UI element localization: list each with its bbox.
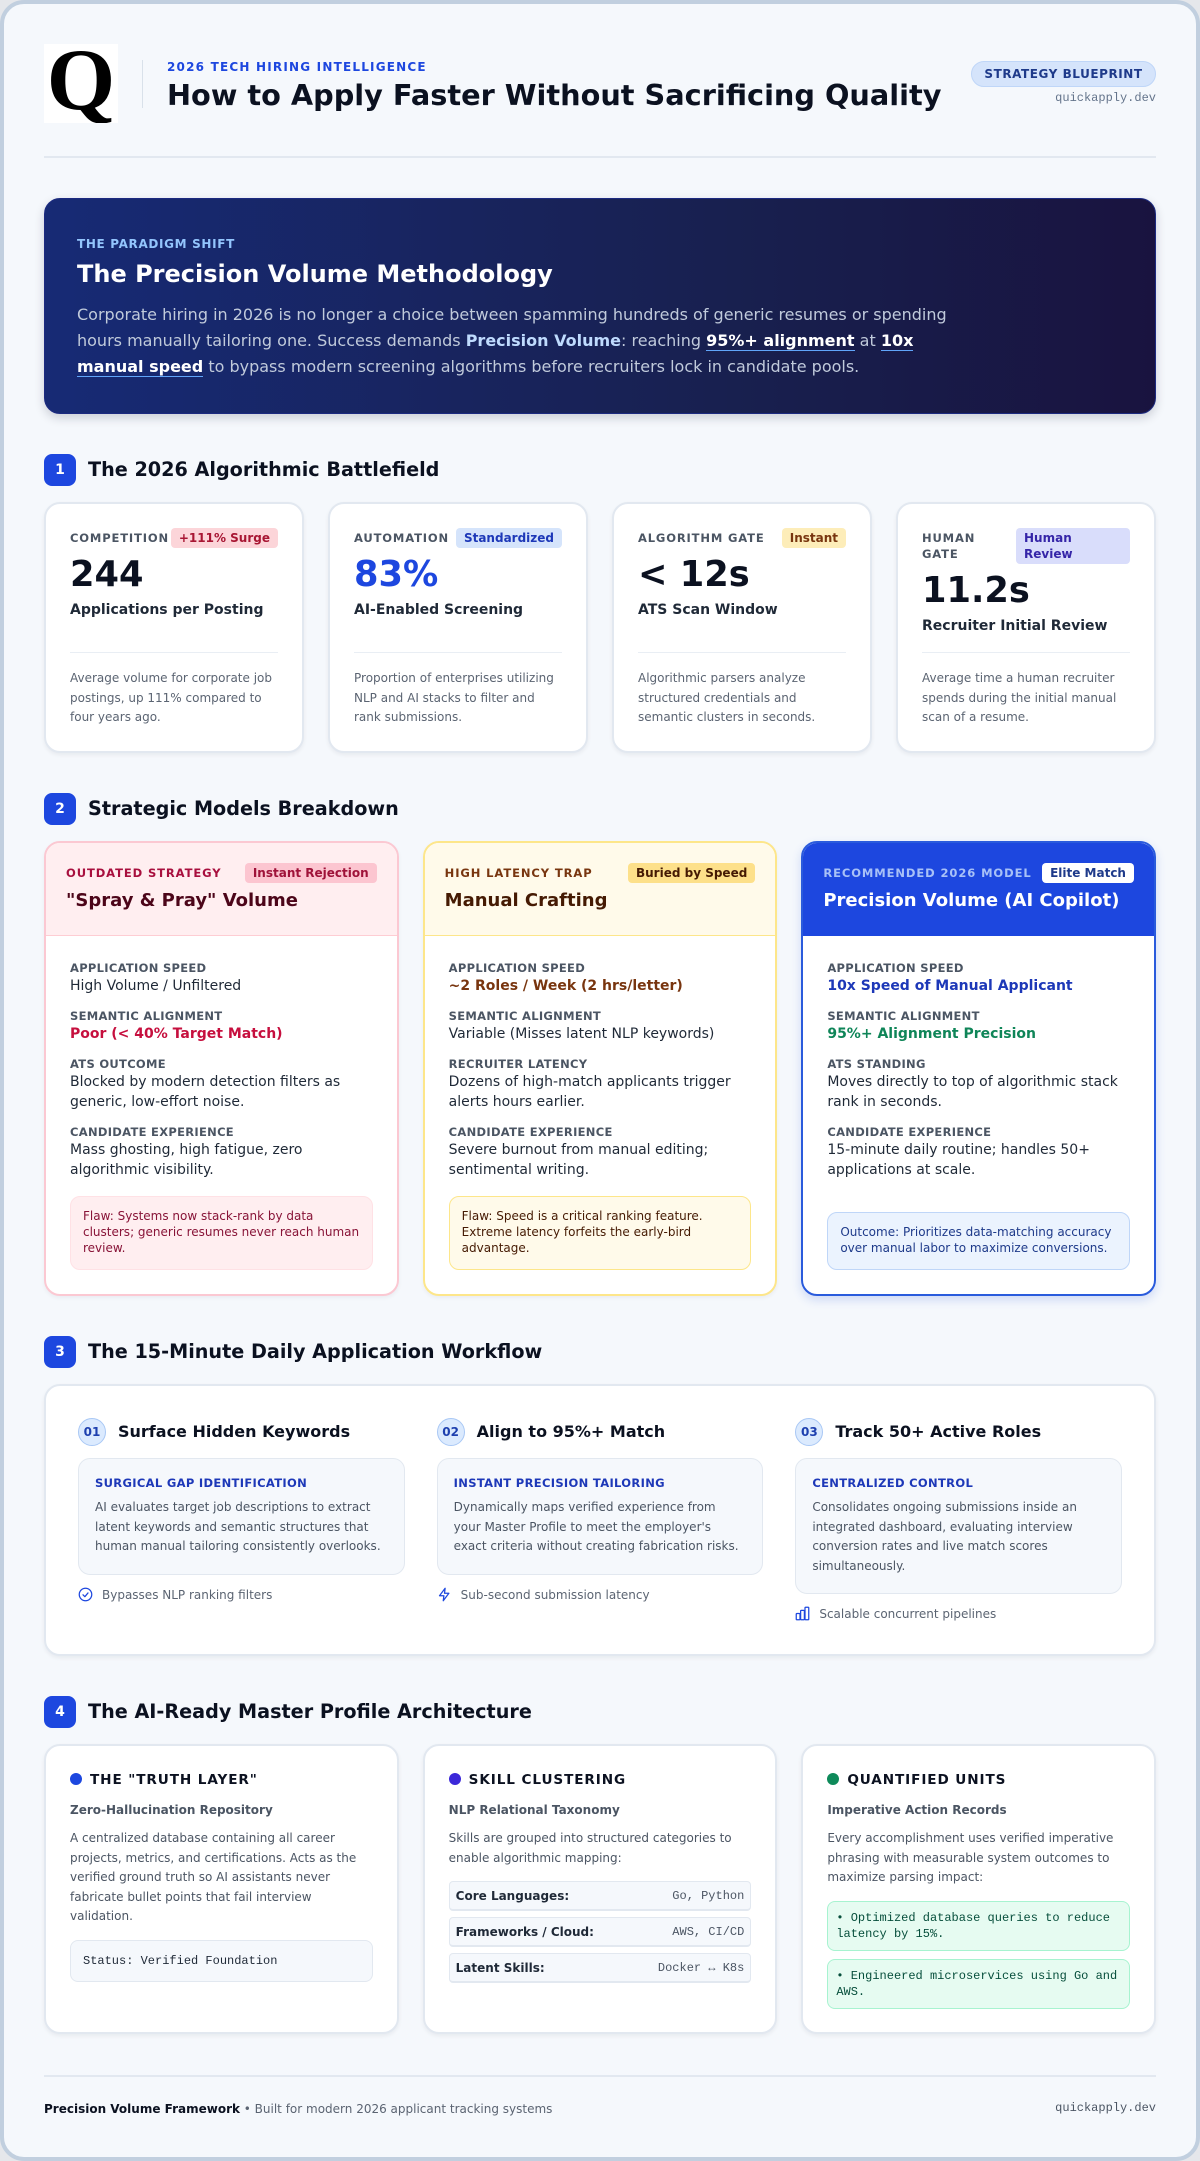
- skill row: core languages: Core Languages:: [456, 1888, 569, 1902]
- step title: Surface Hidden Keywords: [118, 1422, 350, 1441]
- stat badge: Instant: [790, 531, 838, 545]
- model title: Precision Volume (AI Copilot): [823, 890, 1119, 910]
- stat badge: [1016, 528, 1130, 564]
- step detail box: AI evaluates target job descriptions to extract latent keywords and semantic structures that human manual tailoring consistently overlooks.: [95, 1500, 381, 1553]
- icon: check circle: [78, 1588, 92, 1602]
- status box: [70, 1940, 373, 1982]
- section title: The AI-Ready Master Profile Architecture: [88, 1700, 532, 1723]
- model attributes: APPLICATION SPEED: [827, 961, 964, 975]
- stat description: Average time a human recruiter spends during the initial manual scan of a resume.: [922, 671, 1116, 724]
- icon: bar chart: [796, 1606, 810, 1620]
- stat badge: [782, 528, 846, 548]
- model header: [425, 843, 775, 936]
- icon: lightning bolt: [438, 1588, 450, 1602]
- section number: [44, 1336, 76, 1368]
- outcome callout: [827, 1212, 1130, 1270]
- card subheading: Imperative Action Records: [827, 1803, 1007, 1817]
- step detail box: Dynamically maps verified experience from your Master Profile to meet the employer's exact criteria without creating fabrication risks.: [454, 1500, 739, 1553]
- model attributes: SEMANTIC ALIGNMENT: [70, 1009, 222, 1023]
- profile card: skill clustering: [423, 1744, 777, 2034]
- eyebrow: 2026 TECH HIRING INTELLIGENCE: [167, 60, 427, 74]
- hero title: The Precision Volume Methodology: [77, 260, 553, 288]
- stat card: automation: [328, 502, 588, 753]
- model attributes: APPLICATION SPEED: [70, 961, 206, 975]
- flaw callout: [449, 1196, 751, 1270]
- model attributes: Dozens of high-match applicants trigger alerts hours earlier.: [449, 1074, 731, 1110]
- model title: Manual Crafting: [445, 890, 607, 910]
- model badge: Buried by Speed: [636, 866, 747, 880]
- step detail box: INSTANT PRECISION TAILORING: [454, 1476, 665, 1490]
- card heading: SKILL CLUSTERING: [469, 1772, 626, 1788]
- step detail box: SURGICAL GAP IDENTIFICATION: [95, 1476, 307, 1490]
- model attributes: 10x Speed of Manual Applicant: [827, 978, 1073, 994]
- stat badge: [171, 528, 278, 548]
- card heading: QUANTIFIED UNITS: [847, 1772, 1006, 1788]
- section number: [44, 1696, 76, 1728]
- section title: The 15-Minute Daily Application Workflow: [88, 1340, 542, 1363]
- stat label: [922, 531, 975, 561]
- title: How to Apply Faster Without Sacrificing Quality: [167, 78, 942, 112]
- card heading: THE "TRUTH LAYER": [90, 1772, 258, 1788]
- stat caption: Applications per Posting: [70, 602, 264, 618]
- step note: Sub-second submission latency: [461, 1588, 650, 1602]
- flaw callout: Flaw: Speed is a critical ranking feature. Extreme latency forfeits the early-bird advantage.: [462, 1209, 703, 1255]
- model attributes: [448, 961, 731, 1178]
- step number: 02: [442, 1425, 459, 1439]
- model header: [803, 843, 1154, 936]
- section heading 1: [44, 454, 439, 486]
- stat label: AUTOMATION: [354, 531, 449, 545]
- skill row: frameworks and cloud: [449, 1917, 751, 1947]
- stat badge: Human: [1024, 531, 1072, 545]
- step 01: [78, 1418, 405, 1602]
- step detail box: [78, 1458, 405, 1575]
- example bullet 1: • Optimized database queries to reduce latency by 15%.: [836, 1911, 1110, 1941]
- model attributes: Poor (< 40% Target Match): [70, 1026, 283, 1042]
- skill row: latent skills: [449, 1953, 751, 1983]
- step number: 01: [84, 1425, 100, 1439]
- stat value: 11.2s: [922, 570, 1030, 611]
- example bullet 1: [827, 1901, 1130, 1951]
- stat label: ALGORITHM GATE: [638, 531, 765, 545]
- outcome callout: Outcome: Prioritizes data-matching accuracy over manual labor to maximize conversions.: [840, 1225, 1111, 1255]
- stat badge: [456, 528, 562, 548]
- model attributes: RECRUITER LATENCY: [449, 1057, 587, 1071]
- panel: daily workflow: [44, 1384, 1156, 1656]
- skill row: frameworks and cloud: AWS, CI/CD: [672, 1924, 744, 1938]
- model attributes: [70, 961, 340, 1178]
- section heading 2: [44, 793, 399, 825]
- step number: 03: [801, 1425, 818, 1439]
- card subheading: Zero-Hallucination Repository: [70, 1803, 273, 1817]
- hero paragraph: Corporate hiring in 2026 is no longer a choice between spamming hundreds of generic resumes or spending hours manually tailoring one. Success demands Precision Volume: reaching 95%+ alignment at 10x manual speed to bypass modern screening algorithms before recruiters lock in candidate pools.: [77, 304, 947, 376]
- hero eyebrow: THE PARADIGM SHIFT: [77, 237, 235, 251]
- status box: Status: Verified Foundation: [83, 1954, 277, 1968]
- skill row: core languages: Go, Python: [672, 1888, 744, 1902]
- dot marker: [449, 1773, 461, 1785]
- skill row: latent skills: Docker ↔ K8s: [658, 1960, 744, 1974]
- model card: precision volume: [801, 841, 1156, 1296]
- dot marker: [827, 1773, 839, 1785]
- model attributes: SEMANTIC ALIGNMENT: [449, 1009, 601, 1023]
- hero panel: the precision volume methodology: [44, 198, 1156, 414]
- badge: strategy blueprint: STRATEGY BLUEPRINT: [984, 67, 1143, 81]
- step 03: [795, 1418, 1122, 1620]
- model attributes: Moves directly to top of algorithmic stack rank in seconds.: [827, 1074, 1118, 1110]
- model badge: [628, 863, 755, 883]
- model eyebrow: RECOMMENDED 2026 MODEL: [823, 866, 1032, 880]
- section number: 1: [55, 462, 65, 478]
- flaw callout: Flaw: Systems now stack-rank by data clusters; generic resumes never reach human review.: [83, 1209, 359, 1255]
- section number: [44, 793, 76, 825]
- stat description: Algorithmic parsers analyze structured credentials and semantic clusters in seconds.: [638, 671, 815, 724]
- stat description: Proportion of enterprises utilizing NLP and AI stacks to filter and rank submissions.: [354, 671, 554, 724]
- dot marker: [70, 1773, 82, 1785]
- step detail box: [795, 1458, 1122, 1594]
- skill row: latent skills: Latent Skills:: [456, 1960, 545, 1974]
- footer text: Precision Volume Framework • Built for modern 2026 applicant tracking systems: [44, 2102, 552, 2116]
- skill row: core languages: [449, 1881, 751, 1911]
- model attributes: 95%+ Alignment Precision: [827, 1026, 1036, 1042]
- model eyebrow: OUTDATED STRATEGY: [66, 866, 221, 880]
- section number: 4: [55, 1704, 65, 1720]
- model header: [46, 843, 397, 936]
- step note: Scalable concurrent pipelines: [819, 1606, 996, 1620]
- section title: The 2026 Algorithmic Battlefield: [88, 458, 439, 481]
- model attributes: APPLICATION SPEED: [449, 961, 585, 975]
- model badge: Elite Match: [1050, 866, 1126, 880]
- section heading 4: [44, 1696, 532, 1728]
- example bullet 2: [827, 1959, 1130, 2009]
- header: [44, 44, 1156, 123]
- model attributes: ~2 Roles / Week (2 hrs/letter): [449, 978, 683, 994]
- section heading 3: [44, 1336, 542, 1368]
- model card: spray and pray: [44, 841, 399, 1296]
- model attributes: High Volume / Unfiltered: [70, 978, 241, 994]
- step detail box: Consolidates ongoing submissions inside an integrated dashboard, evaluating interview conversion rates and live match scores simultaneously.: [812, 1500, 1077, 1573]
- step number: [78, 1418, 106, 1446]
- model attributes: Blocked by modern detection filters as generic, low-effort noise.: [70, 1074, 340, 1110]
- model attributes: ATS OUTCOME: [70, 1057, 166, 1071]
- step note: Bypasses NLP ranking filters: [102, 1588, 272, 1602]
- stat label: COMPETITION: [70, 531, 169, 545]
- stat description: Average volume for corporate job postings, up 111% compared to four years ago.: [70, 671, 272, 724]
- step number: [437, 1418, 465, 1446]
- model attributes: ATS STANDING: [827, 1057, 926, 1071]
- stat card: human gate: [896, 502, 1156, 753]
- model attributes: Mass ghosting, high fatigue, zero algorithmic visibility.: [70, 1142, 302, 1178]
- model attributes: 15-minute daily routine; handles 50+ applications at scale.: [827, 1142, 1090, 1178]
- badge: strategy blueprint: [971, 61, 1156, 87]
- section number: 3: [55, 1344, 65, 1360]
- stat value: 83%: [354, 554, 438, 595]
- stat badge: Standardized: [464, 531, 554, 545]
- stat label: GATE: [922, 547, 959, 561]
- domain label: quickapply.dev: [1055, 91, 1156, 105]
- step detail box: [437, 1458, 763, 1575]
- model badge: [245, 863, 377, 883]
- stat value: 244: [70, 554, 143, 595]
- model badge: [1042, 863, 1134, 883]
- stat badge: Review: [1024, 547, 1073, 561]
- card subheading: NLP Relational Taxonomy: [449, 1803, 620, 1817]
- model attributes: CANDIDATE EXPERIENCE: [449, 1125, 613, 1139]
- stat caption: AI-Enabled Screening: [354, 602, 523, 618]
- model badge: Instant Rejection: [253, 866, 369, 880]
- stat label: HUMAN: [922, 531, 975, 545]
- step number: [795, 1418, 823, 1446]
- profile card: quantified units: [801, 1744, 1156, 2034]
- section title: Strategic Models Breakdown: [88, 797, 399, 820]
- step 02: [437, 1418, 763, 1602]
- stat caption: Recruiter Initial Review: [922, 618, 1107, 634]
- step title: Align to 95%+ Match: [477, 1422, 665, 1441]
- stat value: < 12s: [638, 554, 750, 595]
- card text: A centralized database containing all career projects, metrics, and certifications. Acts as the verified ground truth so AI assistants never fabricate bullet points that fail interview validation.: [70, 1831, 356, 1923]
- model attributes: Severe burnout from manual editing; sentimental writing.: [449, 1142, 708, 1178]
- model eyebrow: HIGH LATENCY TRAP: [445, 866, 593, 880]
- step detail box: CENTRALIZED CONTROL: [812, 1476, 973, 1490]
- model attributes: SEMANTIC ALIGNMENT: [827, 1009, 980, 1023]
- footer domain: quickapply.dev: [1055, 2101, 1156, 2115]
- card text: Skills are grouped into structured categories to enable algorithmic mapping:: [449, 1831, 732, 1865]
- section number: 2: [55, 801, 65, 817]
- example bullet 2: • Engineered microservices using Go and AWS.: [836, 1969, 1117, 1999]
- model attributes: Variable (Misses latent NLP keywords): [449, 1026, 714, 1042]
- stat badge: +111% Surge: [179, 531, 270, 545]
- stat card: algorithm gate: [612, 502, 872, 753]
- profile card: truth layer: [44, 1744, 399, 2034]
- skill row: frameworks and cloud: Frameworks / Cloud:: [456, 1924, 594, 1938]
- model attributes: [827, 961, 1118, 1178]
- model attributes: CANDIDATE EXPERIENCE: [70, 1125, 234, 1139]
- stat caption: ATS Scan Window: [638, 602, 778, 618]
- stat card: competition: [44, 502, 304, 753]
- model card: manual crafting: [423, 841, 777, 1296]
- flaw callout: [70, 1196, 373, 1270]
- card text: Every accomplishment uses verified imperative phrasing with measurable system outcomes to maximize parsing impact:: [827, 1831, 1113, 1884]
- section number: [44, 454, 76, 486]
- model attributes: CANDIDATE EXPERIENCE: [827, 1125, 991, 1139]
- footer: [44, 2101, 1156, 2116]
- step title: Track 50+ Active Roles: [835, 1422, 1041, 1441]
- model title: "Spray & Pray" Volume: [66, 890, 298, 910]
